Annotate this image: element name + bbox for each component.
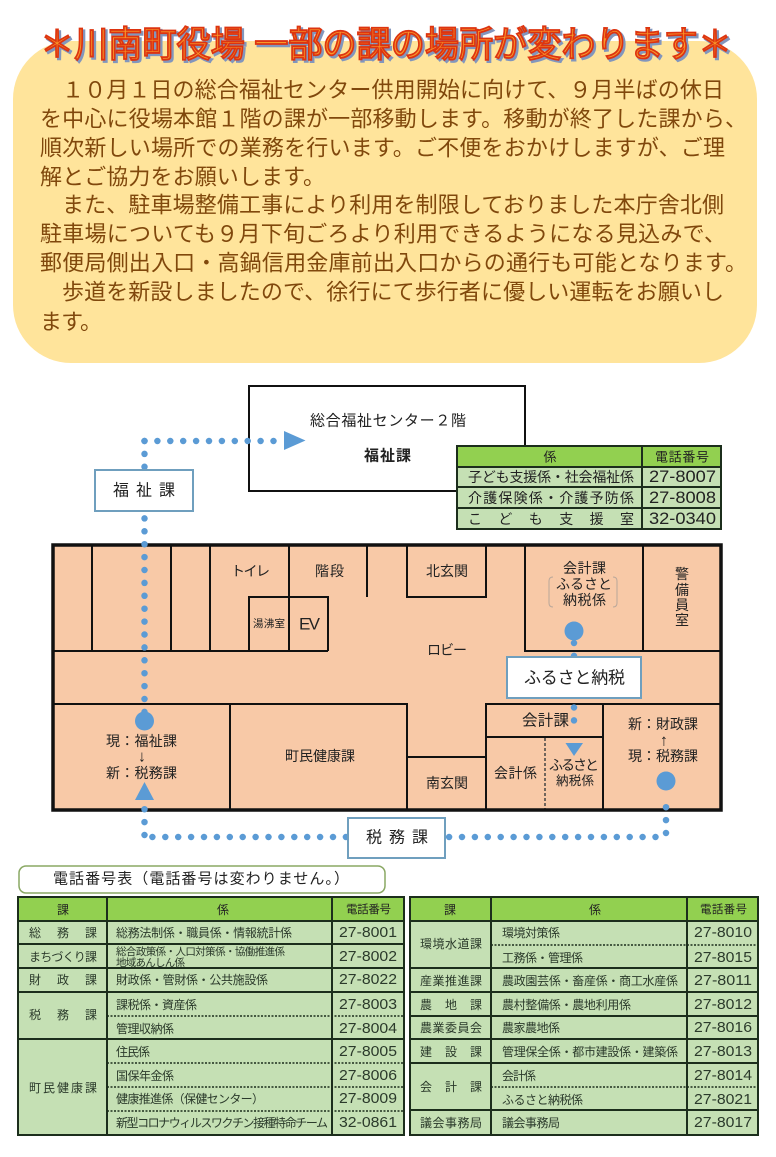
room labels: EV — [299, 614, 321, 634]
intro text: を中心に役場本館１階の課が一部移動します。移動が終了した課から、 — [40, 106, 747, 132]
room labels: ロビー — [427, 642, 467, 658]
left table departments — [29, 925, 97, 1095]
panel: welfare center 2F: 総合福祉センター２階 — [310, 412, 466, 430]
right table numbers: 27-8021 — [694, 1092, 752, 1108]
table: welfare section phone numbers: 32-0340 — [649, 510, 716, 528]
right table sections: 議会事務局 — [502, 1116, 560, 1130]
table: phone list right — [410, 897, 758, 1135]
intro text: 解とご協力をお願いします。 — [40, 164, 325, 190]
table: phone list left: 課 — [57, 903, 69, 917]
intro text: 順次新しい場所での業務を行います。ご不便をおかけしますが、ご理 — [40, 136, 725, 160]
left table sections: 管理収納係 — [116, 1021, 174, 1036]
room labels: 現：税務課 — [628, 748, 698, 764]
intro text — [40, 78, 747, 334]
table: welfare section phone numbers: 電話番号 — [655, 450, 709, 464]
left table numbers: 27-8004 — [339, 1021, 397, 1037]
left table sections: 総務法制係・職員係・情報統計係 — [116, 925, 292, 940]
label: tax section: 税務課 — [366, 828, 428, 846]
right table sections: 管理保全係・都市建設係・建築係 — [502, 1044, 678, 1059]
room labels: 階段 — [315, 563, 344, 579]
label: welfare section — [95, 470, 193, 511]
room labels: 備 — [675, 582, 689, 598]
table: welfare section phone numbers: 27-8008 — [649, 489, 716, 507]
label: furusato tax — [507, 657, 641, 698]
room labels: 警 — [675, 566, 689, 582]
room labels: ふるさと — [556, 576, 612, 592]
right table departments: 議会事務局 — [420, 1116, 482, 1130]
intro text: １０月１日の総合福祉センター供用開始に向けて、９月半ばの休日 — [62, 78, 724, 102]
left table departments: 税務課 — [29, 1008, 97, 1022]
right table sections: 農村整備係・農地利用係 — [502, 998, 631, 1012]
room labels: 会計課 — [522, 712, 569, 730]
intro text: また、駐車場整備工事により利用を制限しておりました本庁舎北側 — [62, 192, 724, 218]
left table sections — [116, 925, 328, 1130]
room labels: 南玄関 — [426, 775, 468, 791]
left table numbers — [339, 925, 397, 1131]
left table numbers: 27-8009 — [339, 1091, 397, 1107]
left table numbers: 27-8005 — [339, 1044, 397, 1060]
title: ＊川南町役場 一部の課の場所が変わります＊ — [40, 24, 732, 64]
intro text: 郵便局側出入口・高鍋信用金庫前出入口からの通行も可能となります。 — [40, 250, 747, 276]
right table sections: 会計係 — [502, 1068, 536, 1083]
room labels: 新：財政課 — [628, 716, 698, 732]
arrow: tax section move — [135, 772, 676, 837]
right table numbers: 27-8015 — [694, 950, 752, 966]
right table numbers: 27-8012 — [694, 997, 752, 1013]
left table sections: 課税係・資産係 — [116, 998, 197, 1012]
right table numbers: 27-8016 — [694, 1020, 752, 1036]
title: ＊川南町役場 一部の課の場所が変わります＊ — [42, 26, 734, 66]
left table sections: 地域あんしん係 — [116, 956, 186, 969]
table: phone list right: 課 — [444, 903, 456, 917]
left table numbers: 27-8022 — [339, 972, 397, 988]
right table numbers — [694, 925, 752, 1131]
left table sections: 国保年金係 — [116, 1069, 174, 1083]
room labels — [106, 560, 698, 791]
room labels: ふるさと — [549, 757, 599, 773]
room labels: ↓ — [138, 748, 146, 766]
right table sections: 農政園芸係・畜産係・商工水産係 — [502, 974, 678, 988]
left table departments: 総務課 — [29, 925, 97, 940]
right table numbers: 27-8013 — [694, 1044, 752, 1060]
right table sections — [502, 926, 678, 1130]
right table departments: 建設課 — [420, 1045, 482, 1059]
phone list heading — [19, 866, 385, 893]
room labels: 納税係 — [563, 592, 606, 608]
arrow: welfare section move — [135, 431, 306, 730]
table: welfare section phone numbers: 27-8007 — [649, 468, 716, 486]
right table sections: 環境対策係 — [502, 926, 560, 940]
right table sections: 工務係・管理係 — [502, 950, 583, 965]
room labels: 町民健康課 — [285, 748, 355, 764]
right table departments: 会計課 — [420, 1079, 482, 1094]
room labels: 室 — [675, 612, 689, 628]
room labels: 湯沸室 — [253, 617, 285, 630]
right table departments: 環境水道課 — [420, 937, 482, 951]
table: welfare section phone numbers: 介護保険係・介護予防係 — [468, 490, 634, 506]
room labels: トイレ — [231, 563, 270, 579]
table: phone list left: 係 — [217, 903, 229, 917]
label: welfare section: 福祉課 — [113, 482, 175, 500]
room labels: 納税係 — [556, 773, 594, 788]
room labels: 新：税務課 — [106, 765, 177, 781]
left table numbers: 27-8001 — [339, 925, 397, 941]
left table departments: まちづくり課 — [29, 950, 97, 964]
intro panel — [13, 41, 757, 363]
room labels: ↑ — [660, 732, 668, 750]
table: welfare section phone numbers — [457, 446, 721, 529]
room labels: 員 — [675, 597, 689, 613]
left table numbers: 27-8003 — [339, 997, 397, 1013]
intro text: 駐車場についても９月下旬ごろより利用できるようになる見込みで、 — [40, 222, 726, 246]
table: phone list left — [18, 897, 404, 1135]
left table numbers: 27-8006 — [339, 1068, 397, 1084]
right table departments: 農業委員会 — [420, 1021, 482, 1035]
right table departments: 農地課 — [420, 998, 482, 1012]
room labels: 現：福祉課 — [106, 733, 177, 749]
table: phone list left: 電話番号 — [346, 903, 391, 916]
room labels: 会計係 — [494, 765, 537, 781]
label: furusato tax: ふるさと納税 — [524, 668, 625, 688]
room labels: 北玄関 — [426, 563, 468, 579]
right table departments: 産業推進課 — [420, 973, 482, 988]
panel: welfare center 2F: 福祉課 — [364, 448, 411, 464]
left table sections: 健康推進係（保健センター） — [116, 1091, 264, 1106]
floor plan — [52, 545, 722, 810]
left table numbers: 27-8002 — [339, 949, 397, 965]
left table sections: 財政係・管財係・公共施設係 — [116, 972, 268, 987]
right table sections: ふるさと納税係 — [502, 1092, 583, 1107]
right table numbers: 27-8014 — [694, 1068, 752, 1084]
right table numbers: 27-8010 — [694, 925, 752, 941]
right table sections: 農家農地係 — [502, 1021, 560, 1035]
table: phone list right: 電話番号 — [700, 903, 747, 916]
left table sections: 総合政策係・人口対策係・協働推進係 — [116, 945, 286, 958]
table: welfare section phone numbers: こども支援室 — [468, 511, 634, 527]
left table sections: 住民係 — [116, 1045, 150, 1059]
left table sections: 新型コロナウィルスワクチン接種特命チーム — [116, 1115, 328, 1130]
table: welfare section phone numbers: 子ども支援係・社会福祉係 — [468, 469, 634, 485]
intro text: 歩道を新設しましたので、徐行にて歩行者に優しい運転をお願いし — [62, 280, 724, 304]
right table numbers: 27-8011 — [694, 973, 752, 989]
left table departments: 町民健康課 — [29, 1081, 97, 1095]
phone list heading: 電話番号表（電話番号は変わりません。） — [53, 870, 349, 888]
intro text: ます。 — [40, 310, 102, 334]
table: phone list right: 係 — [589, 903, 601, 917]
table: welfare section phone numbers: 係 — [543, 450, 557, 464]
room labels: 会計課 — [563, 560, 606, 576]
panel: welfare center 2F — [249, 386, 525, 491]
left table departments: 財政課 — [29, 972, 97, 987]
right table numbers: 27-8017 — [694, 1115, 752, 1131]
arrow: furusato tax move — [564, 622, 584, 756]
left table numbers: 32-0861 — [339, 1115, 397, 1131]
label: tax section — [348, 818, 445, 858]
right table departments — [420, 937, 482, 1130]
